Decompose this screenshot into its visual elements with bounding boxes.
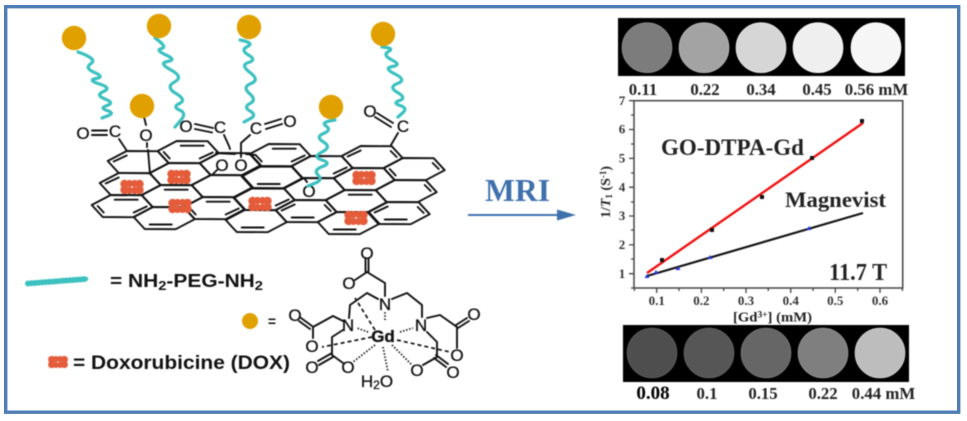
Gd-DTPA chemical structure: O [342,274,356,293]
relaxation rate chart: Magnevist [785,187,887,212]
atom labels on sheet: O [363,102,377,121]
Gd-DTPA chemical structure: O [446,363,460,382]
x tick labels: 0.6 [872,293,889,308]
y tick labels: 1 [619,266,625,281]
relaxation rate chart: 1 [604,194,614,199]
Gd-DTPA chemical structure: Gd [371,327,395,346]
bottom MRI phantom strip [623,325,909,382]
top MRI phantom strip [618,18,905,76]
doxorubicine molecules on sheet [120,170,376,225]
legend: PEG: 2 [158,278,166,293]
Gd-DTPA chemical structure: O [305,337,319,356]
x tick labels [649,293,889,308]
x tick labels: 0.4 [783,293,799,308]
Gd-DTPA chemical structure: O [410,361,424,380]
atom labels on sheet: O [179,117,193,136]
relaxation rate chart: 1/T [599,199,614,218]
axis titles: [Gd [733,310,756,326]
legend: PEG [28,270,263,293]
legend: PEG: = NH [110,270,153,291]
axis titles: 3+ [757,310,768,320]
PEG chains [78,38,405,186]
bottom concentration labels [636,383,915,404]
relaxation rate chart: ) [599,166,614,171]
atom labels on sheet: O [283,112,297,131]
y tick labels: 3 [619,208,626,223]
Gd-DTPA chemical structure: O [288,306,302,325]
x tick labels: 0.2 [693,293,710,308]
Gd-DTPA chemical structure: N [415,316,427,335]
Gd-DTPA chemical structure: O [341,358,355,377]
atom labels on sheet: O [76,124,90,143]
legend: PEG: 2 [255,278,263,293]
legend: gold ball equals: = [268,313,276,329]
GO-DTPA-Gd series [647,119,864,273]
relaxation rate chart [598,93,903,326]
Gd-DTPA chemical structure: 2 [373,378,380,392]
x tick labels: 0.5 [827,293,844,308]
graphene oxide structure [62,14,445,234]
bottom concentration labels: 0.1 [697,384,717,403]
y tick labels: 5 [619,150,626,166]
bottom concentration labels: 0.22 [808,384,838,403]
Gd-DTPA chemical structure: O [467,305,481,324]
atom labels on sheet: C [214,118,226,137]
top concentration labels [629,80,908,99]
legend: gold ball equals [242,313,276,329]
x tick labels: 0.3 [738,293,755,308]
bottom concentration labels: 0.44 mM [852,384,915,403]
relaxation rate chart: (S [599,178,614,194]
Gd-DTPA chemical structure: O [450,346,464,365]
y tick labels: 4 [619,180,626,194]
legend: PEG: -PEG-NH [166,270,255,291]
atom labels on sheet: O [215,156,229,175]
y tick labels: 2 [619,237,625,252]
y tick labels [619,93,626,281]
relaxation rate chart: -1 [598,170,608,178]
graphene sheet [92,141,445,234]
top concentration labels: 0.22 [690,80,720,99]
Magnevist series [644,213,863,278]
bottom concentration labels: 0.08 [636,383,670,404]
x tick labels: 0.1 [649,293,665,308]
legend: doxorubicine: = Doxorubicine (DOX) [73,353,290,374]
MRI label: MRI [485,172,550,208]
Gd-DTPA chemical structure: N [379,295,391,314]
Gd-DTPA chemical structure: O [360,244,374,263]
gold Gd-DTPA balls [62,14,395,119]
Gd-DTPA chemical structure: N [342,316,354,335]
chart axes and ticks [629,101,903,293]
y tick labels: 6 [619,122,626,136]
y tick labels: 7 [619,93,626,108]
atom labels on sheet: C [250,119,262,138]
Gd-DTPA chemical structure: O [380,372,393,391]
atom labels on sheet: C [109,122,121,141]
top concentration labels: 0.11 [629,80,657,99]
bottom concentration labels: 0.15 [748,384,778,403]
top concentration labels: 0.45 [802,80,832,99]
atom labels on sheet: C [397,117,409,136]
top concentration labels: 0.56 mM [845,80,908,99]
Gd-DTPA chemical structure [288,244,481,392]
functional group bonds [92,113,398,182]
atom labels on sheet: O [234,156,248,175]
axis titles: ] (mM) [768,310,812,326]
top concentration labels: 0.34 [746,80,776,99]
atom labels on sheet: O [139,126,153,145]
atom labels on sheet: O [302,182,316,201]
MRI arrow [468,210,576,220]
relaxation rate chart: 11.7 T [829,260,887,286]
Gd-DTPA chemical structure: H [361,372,373,391]
Gd-DTPA chemical structure: O [305,358,319,377]
atom labels on sheet [76,102,409,201]
series labels: GO-DTPA-Gd [661,135,804,160]
